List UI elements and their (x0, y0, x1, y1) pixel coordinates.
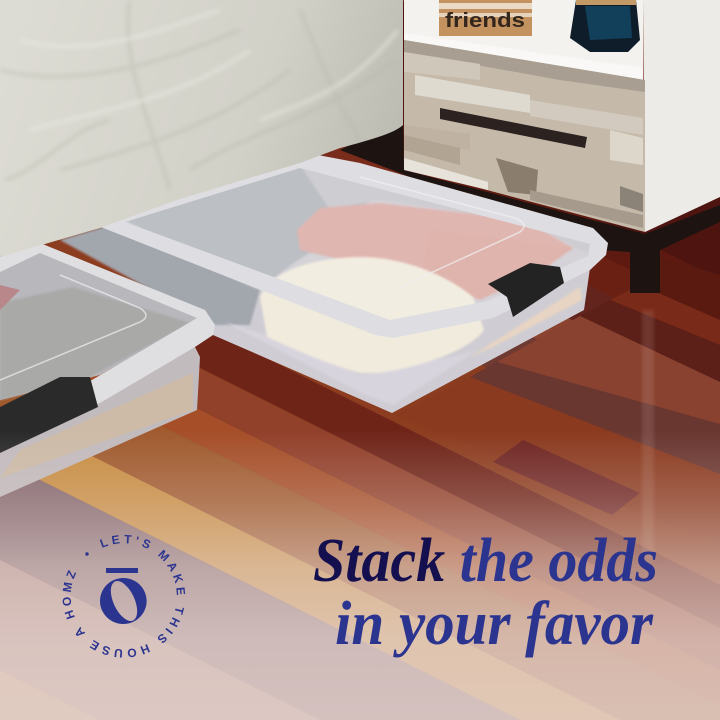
nightstand side (643, 0, 720, 232)
headline (313, 527, 658, 658)
clip (488, 263, 564, 317)
dark base under nightstand (340, 118, 720, 293)
lid crease (360, 177, 524, 287)
panel: nightstand (404, 0, 720, 232)
bin lid rim (0, 243, 215, 442)
logo badge (62, 534, 186, 658)
drawer wood panels (404, 40, 645, 228)
dark jar (570, 0, 640, 52)
bedspread (0, 0, 403, 257)
nightstand shelf (404, 0, 643, 80)
macron (106, 568, 138, 573)
sign: friends (439, 0, 532, 36)
fade overlay (0, 430, 720, 720)
letter o (100, 578, 147, 624)
folded clothes (0, 252, 200, 478)
slogan dot (85, 552, 89, 556)
drawer front (404, 40, 645, 232)
bin lid rim (98, 152, 608, 338)
right side planks (395, 250, 720, 560)
panel: storage bin right (60, 152, 608, 413)
bin interior (110, 155, 600, 413)
panel: storage bin left (0, 243, 215, 497)
lid crease (0, 275, 146, 380)
sign: friends: friends (445, 10, 525, 32)
bin body (0, 347, 200, 497)
clip (0, 377, 98, 453)
circular slogan: LET'S MAKE THIS HOUSE A HOMZ (62, 534, 186, 658)
folded clothes (60, 165, 590, 405)
drawer handle (440, 108, 587, 148)
lid panel highlight (125, 168, 590, 320)
headline line 1: Stack the odds (313, 527, 658, 595)
headline line 2: in your favor (335, 590, 654, 658)
